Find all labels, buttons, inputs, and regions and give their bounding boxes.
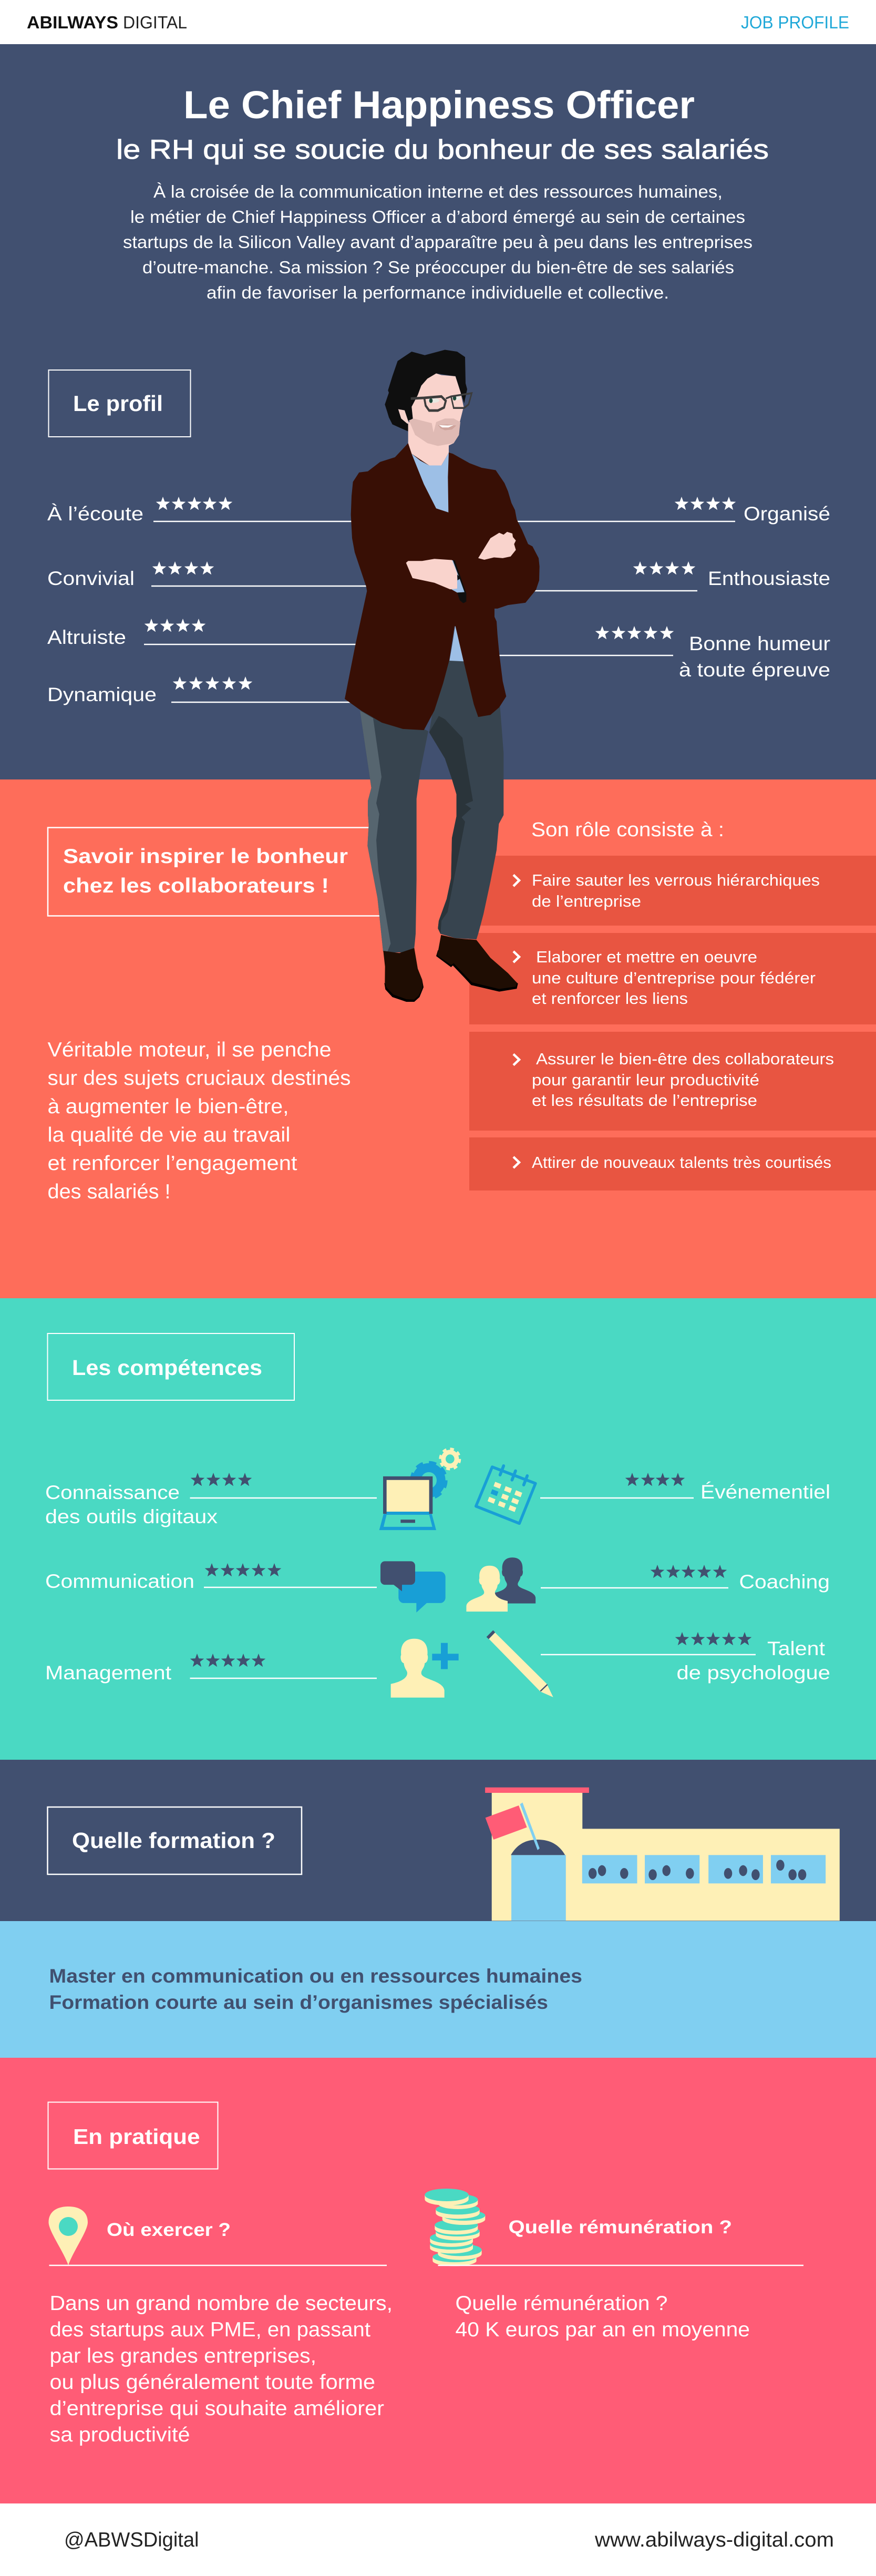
icon: pencil	[487, 1630, 553, 1697]
subtitle: le RH qui se soucie du bonheur de ses salariés	[116, 135, 769, 165]
panel: footer background	[0, 2503, 876, 2576]
skill: Management	[45, 1654, 377, 1684]
training details text: Master en communication ou en ressources humaines	[49, 1965, 582, 1987]
heading: Le profil: Le profil	[73, 391, 163, 416]
logo: Abilways Digital: DIGITAL	[123, 13, 187, 32]
job profile tag: JOB PROFILE	[741, 13, 849, 32]
panel: training background	[0, 1760, 876, 1921]
role item 4: Attirer de nouveaux talents très courtisés	[532, 1153, 831, 1172]
role item 4	[469, 1137, 876, 1190]
rating: Convivial: Convivial	[47, 568, 135, 589]
skill: Coaching: Coaching	[739, 1571, 830, 1593]
role item 3: Assurer le bien-être des collaborateurs	[536, 1050, 834, 1068]
skill: Communication	[45, 1563, 377, 1592]
rating: Enthousiaste: Enthousiaste	[708, 568, 830, 589]
text: sectors: ou plus généralement toute forme	[49, 2371, 375, 2394]
text: sectors: par les grandes entreprises,	[49, 2345, 316, 2367]
callout: Savoir inspirer le bonheur: Savoir inspirer le bonheur	[63, 845, 348, 868]
rating: Convivial	[47, 561, 399, 589]
text: sectors	[49, 2292, 393, 2446]
panel: profile background	[0, 44, 876, 779]
skill: Connaissance des outils digitaux	[45, 1473, 377, 1527]
skill icons	[379, 1449, 553, 1698]
jacket, shirt and head	[345, 350, 540, 730]
intro paragraph	[123, 182, 753, 302]
panel: role background	[0, 779, 876, 1298]
training details text	[49, 1965, 582, 2013]
callout: Savoir inspirer le bonheur	[48, 827, 395, 916]
rating: A l'ecoute	[47, 497, 399, 525]
role item 2: et renforcer les liens	[532, 989, 688, 1008]
panel: training details background	[0, 1921, 876, 2058]
heading: En pratique: En pratique	[73, 2125, 200, 2149]
role item 2: Elaborer et mettre en oeuvre	[536, 948, 757, 966]
text: sectors: d’entreprise qui souhaite améliorer	[49, 2397, 384, 2420]
text: salary: Quelle rémunération ?	[455, 2292, 667, 2315]
skill: Communication: Communication	[45, 1571, 194, 1592]
paragraph: moteur: sur des sujets cruciaux destinés	[47, 1067, 351, 1090]
intro paragraph: À la croisée de la communication interne et des ressources humaines,	[153, 182, 723, 201]
rating: Dynamique	[47, 676, 399, 705]
rating: Organise: Organisé	[744, 503, 830, 525]
intro paragraph: le métier de Chief Happiness Officer a d’abord émergé au sein de certaines	[130, 207, 745, 227]
skill: Connaissance des outils digitaux: Connaissance	[45, 1482, 180, 1503]
rating: Enthousiaste	[473, 561, 830, 591]
paragraph: moteur: des salariés !	[47, 1181, 170, 1203]
rating: Organise	[473, 497, 830, 525]
sub-heading: Quelle remuneration: Quelle rémunération ?	[509, 2217, 732, 2238]
salary block	[425, 2189, 803, 2341]
illustration: man with crossed arms	[345, 350, 540, 1002]
skill: Evenementiel	[540, 1473, 830, 1503]
icon: map pin	[48, 2206, 88, 2265]
icon: person with plus	[391, 1639, 459, 1698]
paragraph: moteur: à augmenter le bien-être,	[47, 1095, 289, 1118]
icon: laptop and gears	[379, 1449, 460, 1530]
role item 1	[469, 856, 876, 926]
logo: Abilways Digital	[27, 13, 187, 32]
text: salary	[455, 2292, 750, 2341]
heading: Le profil	[48, 370, 190, 437]
rating: Altruiste: Altruiste	[47, 627, 126, 648]
role item 1: Faire sauter les verrous hiérarchiques	[532, 871, 820, 889]
role item 3: et les résultats de l’entreprise	[532, 1091, 757, 1110]
rating: Bonne humeur	[473, 626, 830, 681]
skill: Management: Management	[45, 1662, 172, 1684]
rating: Bonne humeur: Bonne humeur	[689, 633, 830, 654]
header band	[0, 0, 876, 44]
trousers and shoes	[360, 659, 518, 1002]
illustration: school building	[485, 1788, 840, 1921]
role item 2: une culture d’entreprise pour fédérer	[532, 969, 816, 987]
role item 3	[469, 1032, 876, 1131]
skill: Talent de psychologue: de psychologue	[677, 1662, 830, 1684]
role heading: Son rôle consiste à :	[531, 819, 724, 841]
rating: Altruiste	[47, 619, 399, 648]
skill: Talent de psychologue: Talent	[767, 1638, 826, 1659]
intro paragraph: d’outre-manche. Sa mission ? Se préoccuper du bien-être de ses salariés	[142, 258, 734, 277]
icon: calendar	[476, 1466, 535, 1523]
text: sectors: sa productivité	[49, 2424, 190, 2446]
role item 3: pour garantir leur productivité	[532, 1071, 759, 1089]
skill: Connaissance des outils digitaux: des outils digitaux	[45, 1506, 218, 1527]
role item 2	[469, 933, 876, 1024]
heading: Quelle formation	[47, 1807, 302, 1874]
skill: Coaching	[541, 1565, 830, 1593]
paragraph: moteur: et renforcer l’engagement	[47, 1152, 297, 1175]
sub-heading: Ou exercer: Où exercer ?	[107, 2220, 231, 2240]
training details text: Formation courte au sein d’organismes spécialisés	[49, 1992, 548, 2013]
heading: Les competences: Les compétences	[72, 1356, 262, 1380]
icon: speech bubbles	[380, 1561, 446, 1613]
skill: Talent de psychologue	[541, 1632, 830, 1684]
paragraph: moteur: la qualité de vie au travail	[47, 1124, 290, 1146]
panel: skills background	[0, 1298, 876, 1760]
panel: role list	[469, 856, 876, 1190]
rating: A l'ecoute: À l’écoute	[47, 503, 143, 525]
heading: En pratique	[48, 2102, 218, 2169]
rating: Dynamique: Dynamique	[47, 684, 157, 705]
role item 1: de l’entreprise	[532, 892, 641, 910]
where to work block	[48, 2206, 393, 2446]
paragraph: moteur	[47, 1039, 351, 1203]
heading: Les competences	[47, 1333, 294, 1400]
footer url: www.abilways-digital.com	[594, 2529, 834, 2551]
icon: coaching people	[466, 1557, 535, 1612]
paragraph: moteur: Véritable moteur, il se penche	[47, 1039, 331, 1061]
icon: coin stack	[425, 2189, 485, 2266]
text: sectors: des startups aux PME, en passant	[49, 2318, 370, 2341]
intro paragraph: startups de la Silicon Valley avant d’apparaître peu à peu dans les entreprises	[123, 232, 753, 252]
skill: Evenementiel: Événementiel	[700, 1481, 830, 1503]
heading: Quelle formation: Quelle formation ?	[72, 1828, 275, 1853]
title: Le Chief Happiness Officer	[183, 83, 695, 127]
logo: Abilways Digital: ABILWAYS	[27, 13, 118, 32]
text: salary: 40 K euros par an en moyenne	[455, 2318, 750, 2341]
rating: Bonne humeur: à toute épreuve	[679, 659, 830, 681]
callout: Savoir inspirer le bonheur: chez les collaborateurs !	[63, 875, 329, 897]
intro paragraph: afin de favoriser la performance individuelle et collective.	[207, 283, 669, 302]
panel: in practice background	[0, 2058, 876, 2503]
footer handle: @ABWSDigital	[64, 2529, 199, 2551]
text: sectors: Dans un grand nombre de secteurs,	[49, 2292, 393, 2315]
